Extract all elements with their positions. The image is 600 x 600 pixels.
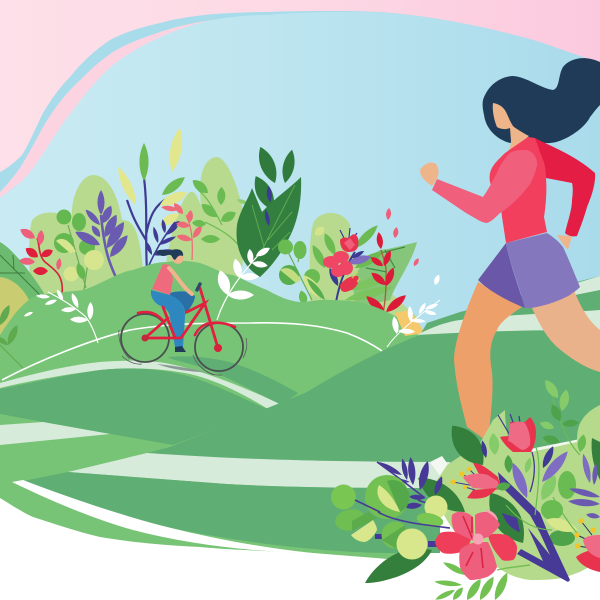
left foreground sprig (0, 304, 23, 368)
plant: tall navy stem with fern (114, 127, 189, 270)
runner (420, 58, 600, 442)
navy fern left (375, 457, 445, 547)
green sprig, top right (488, 377, 588, 546)
bouquet foreground (331, 377, 600, 600)
white ribbon behind bouquet (530, 439, 580, 452)
tulip: red left (450, 463, 512, 499)
bicycle and rider (119, 249, 247, 375)
lower pale road (68, 453, 450, 488)
bottom fern (434, 560, 530, 600)
navy leaf inside dark leaf (502, 513, 520, 532)
white sprigs (23, 245, 271, 343)
right dark hill (147, 276, 600, 470)
eucalyptus stems (355, 500, 450, 528)
navy branch leaf (498, 472, 570, 582)
runner hair (483, 58, 600, 143)
bouquet pale base (435, 405, 600, 580)
middle dark hill (0, 356, 298, 445)
runner back sleeve (535, 138, 595, 236)
runner front leg (454, 282, 522, 442)
plant: purple fern leaf (73, 190, 131, 282)
tulip: right edge (574, 518, 600, 572)
runner front arm (432, 150, 537, 223)
runner torso (490, 137, 547, 243)
runner fist (420, 163, 439, 186)
shadow under bicycle (157, 364, 205, 372)
right pale road stripes (417, 276, 600, 335)
pale road at far left (0, 422, 110, 445)
white patch on road (430, 456, 452, 476)
left hill with olive patch (0, 242, 48, 370)
plant: right eucalyptus (278, 224, 327, 306)
runner face and neck (493, 103, 529, 153)
plant: red sprig with paired leaves (364, 208, 420, 345)
background: blue and pink swoosh with sky (0, 11, 600, 420)
hill path: pale curving road (0, 361, 282, 409)
hill path: thin white line (2, 323, 382, 380)
eucalyptus leaves (331, 475, 448, 560)
background: white ground (0, 420, 600, 600)
rider legs and shorts (151, 290, 185, 347)
runner hand on hip (557, 235, 572, 250)
main light green hill (0, 261, 420, 560)
large pink flower (435, 510, 517, 580)
runner back leg (532, 288, 600, 372)
plant: eucalyptus (54, 210, 104, 290)
rider arm and head (169, 268, 192, 294)
tulip: top (498, 414, 536, 492)
purple leaves (480, 440, 600, 519)
dark leaves (365, 418, 600, 583)
bicycle wheels (119, 314, 247, 375)
bicycle frame (138, 288, 235, 348)
plant: red sprig (18, 226, 62, 294)
back bushes (29, 157, 420, 320)
plant: green sprig (190, 177, 251, 260)
plant: dark large leaves (237, 144, 301, 277)
background: pink sky frame (0, 0, 600, 420)
plant: green leaves with red flowers (309, 223, 417, 307)
lower dark hill (23, 472, 440, 553)
thin green stems over branch (506, 445, 552, 530)
white and yellow sprig by the hill edge (387, 274, 441, 347)
rider shirt (152, 264, 173, 295)
white slit in the hill (12, 480, 313, 553)
plant: salmon sprig (161, 201, 204, 260)
runner shorts (478, 233, 580, 308)
